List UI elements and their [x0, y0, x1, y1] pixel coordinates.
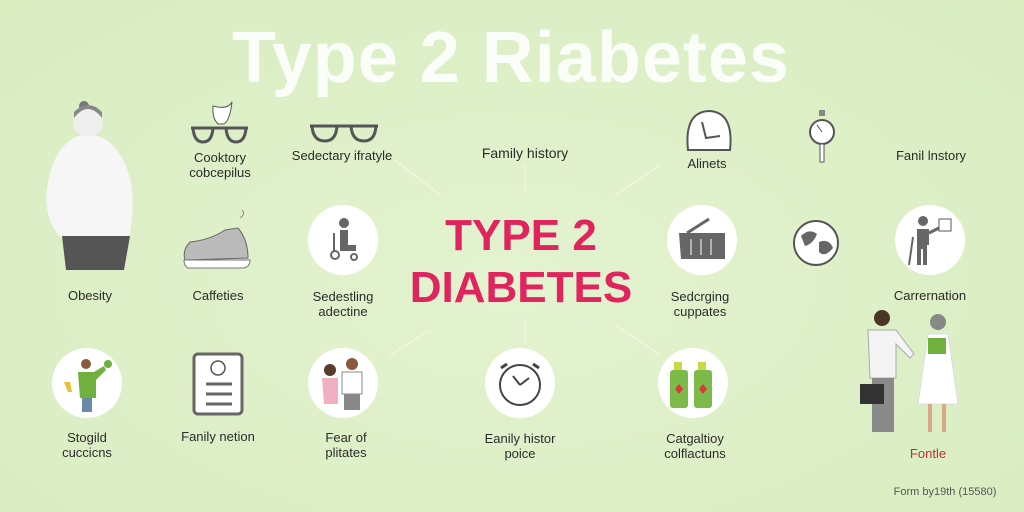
icon: person with produce	[52, 348, 122, 418]
label: eanily histor: poice	[504, 446, 536, 461]
icon: globe	[793, 220, 839, 266]
label: fear of: plitates	[325, 445, 367, 460]
label: fear of	[325, 430, 367, 460]
label: eanily histor	[485, 431, 556, 461]
central heading: DIABETES	[410, 263, 632, 312]
label: sedestling: adectine	[318, 304, 368, 319]
label: fear of: Fear of	[325, 430, 367, 445]
label: stogild	[62, 430, 112, 460]
icon: gauge	[686, 110, 732, 151]
icon: checklist	[192, 352, 244, 416]
label: catgaltioy: colflactuns	[664, 446, 726, 461]
label: sedcrging: Sedcrging	[671, 289, 729, 304]
label: sedestling: Sedestling	[313, 289, 373, 304]
label: stogild: cuccicns	[62, 445, 112, 460]
icon: shoe	[184, 210, 250, 268]
label: family history: Family history	[482, 145, 568, 161]
icon: stopwatch	[809, 110, 835, 162]
label: eanily histor: Eanily histor	[485, 431, 555, 446]
label: family history right: Fanil lnstory	[896, 148, 966, 163]
central heading: TYPE 2	[445, 211, 597, 260]
label: sedentary lifestyle: Sedectary ifratyle	[292, 148, 392, 163]
icon: alarm clock	[485, 348, 555, 418]
label: fontle: Fontle	[910, 446, 946, 461]
label: obesity: Obesity	[68, 288, 112, 303]
label: catgaltioy	[664, 431, 726, 461]
icon: bottles	[658, 348, 728, 418]
label: carrernation: Carrernation	[894, 288, 966, 303]
icon: basket	[667, 205, 737, 275]
footer: Form by19th (15580)	[894, 486, 996, 498]
label: cooktory: Cooktory	[194, 150, 246, 165]
label: sedestling	[313, 289, 373, 319]
label: catgaltioy: Catgaltioy	[666, 431, 724, 446]
icon: person with sign	[895, 205, 965, 275]
label: alinets: Alinets	[687, 156, 727, 171]
icon: cup and glasses	[191, 102, 248, 144]
label: fanily netion: Fanily netion	[181, 429, 255, 444]
icon: obese figure	[46, 101, 132, 270]
label: caffeties: Caffeties	[192, 288, 244, 303]
icon: person in wheelchair	[308, 205, 378, 275]
icon: couple	[860, 310, 958, 432]
label: stogild: Stogild	[67, 430, 107, 445]
label: cooktory	[189, 150, 251, 180]
icon: two people	[308, 348, 378, 418]
label: cooktory: cobcepilus	[189, 165, 251, 180]
label: sedcrging	[671, 289, 729, 319]
title: Type 2 Riabetes	[232, 18, 790, 98]
label: sedcrging: cuppates	[674, 304, 726, 319]
central heading	[410, 211, 632, 312]
icon: glasses	[310, 124, 378, 142]
